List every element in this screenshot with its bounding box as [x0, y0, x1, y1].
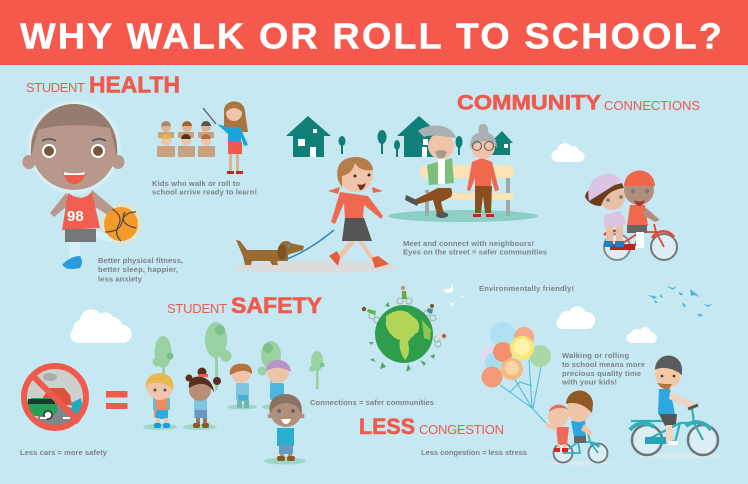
- cloud: [626, 327, 657, 343]
- illustration: grandparents on a bench: [388, 124, 538, 222]
- heading: less congestion: [359, 414, 504, 439]
- text: ready to learn: [152, 179, 257, 196]
- text: physical fitness: [98, 256, 183, 284]
- child: girl with buns: [186, 368, 221, 428]
- text: ready to learn: Kids who walk or roll to: [152, 179, 240, 188]
- illustration: green trees: [152, 322, 324, 390]
- illustration: teacher and classroom: [157, 102, 248, 174]
- text: physical fitness: better sleep, happier,: [98, 265, 178, 274]
- illustration: houses and trees: [286, 116, 513, 157]
- text: physical fitness: less anxiety: [98, 274, 143, 284]
- icon: no cars sign: [24, 366, 86, 428]
- illustration: girl walking a dog: [235, 157, 399, 273]
- illustration: father on blue bicycle: [630, 356, 724, 458]
- title banner: WHY WALK OR ROLL TO SCHOOL?: [20, 16, 724, 56]
- text: physical fitness: Better physical fitness,: [98, 256, 183, 265]
- heading: student safety: [167, 293, 322, 318]
- text: quality time: with your kids!: [561, 378, 617, 386]
- child: child in purple hat: [266, 360, 291, 400]
- title banner: [0, 0, 748, 65]
- heading: student safety: STUDENT: [167, 301, 227, 316]
- illustration: balloons: [480, 322, 551, 423]
- icon: blue birds: [648, 286, 713, 317]
- heading: community connections: COMMUNITY: [457, 90, 601, 114]
- text: ready to learn: school arrive ready to learn!: [152, 188, 257, 196]
- illustration: globe with cyclists: [362, 286, 446, 372]
- illustration: boy with basketball: [22, 102, 140, 269]
- text: connections: Connections = safer communities: [310, 398, 434, 407]
- child: small boy: [230, 363, 252, 408]
- icon: equals sign: [106, 391, 128, 409]
- illustration: walking children: [143, 360, 306, 464]
- cloud: [556, 306, 595, 329]
- heading: community connections: [457, 90, 700, 114]
- illustration: two kids on red bicycle: [585, 170, 677, 260]
- heading: community connections: CONNECTIONS: [604, 98, 700, 113]
- text: meet and connect: Eyes on the street = safer communities: [403, 248, 547, 256]
- heading: student health: [26, 72, 180, 98]
- text: less cars: Less cars = more safety: [20, 448, 108, 457]
- text: environmentally friendly: Environmentally friendly!: [479, 284, 574, 293]
- text: quality time: Walking or rolling: [562, 351, 629, 360]
- heading: student health: HEALTH: [89, 72, 180, 98]
- heading: student safety: SAFETY: [231, 293, 322, 318]
- heading: less congestion: CONGESTION: [419, 422, 504, 437]
- child: blond boy: [146, 373, 173, 428]
- heading: student health: STUDENT: [26, 80, 85, 95]
- child: big boy: [268, 394, 304, 461]
- text: less congestion: Less congestion = less stress: [421, 448, 527, 457]
- heading: less congestion: LESS: [359, 414, 415, 439]
- cloud: [70, 309, 131, 343]
- text: quality time: [561, 351, 645, 386]
- text: quality time: to school means more: [562, 360, 645, 369]
- illustration: children on blue bicycle: [545, 390, 614, 465]
- illustration: boy with basketball: 98: [67, 208, 84, 225]
- cloud: [551, 143, 584, 162]
- icon: white birds: [442, 283, 464, 306]
- text: meet and connect: [403, 239, 547, 256]
- text: quality time: precious quality time: [562, 369, 641, 378]
- text: meet and connect: Meet and connect with neighbours!: [403, 239, 534, 248]
